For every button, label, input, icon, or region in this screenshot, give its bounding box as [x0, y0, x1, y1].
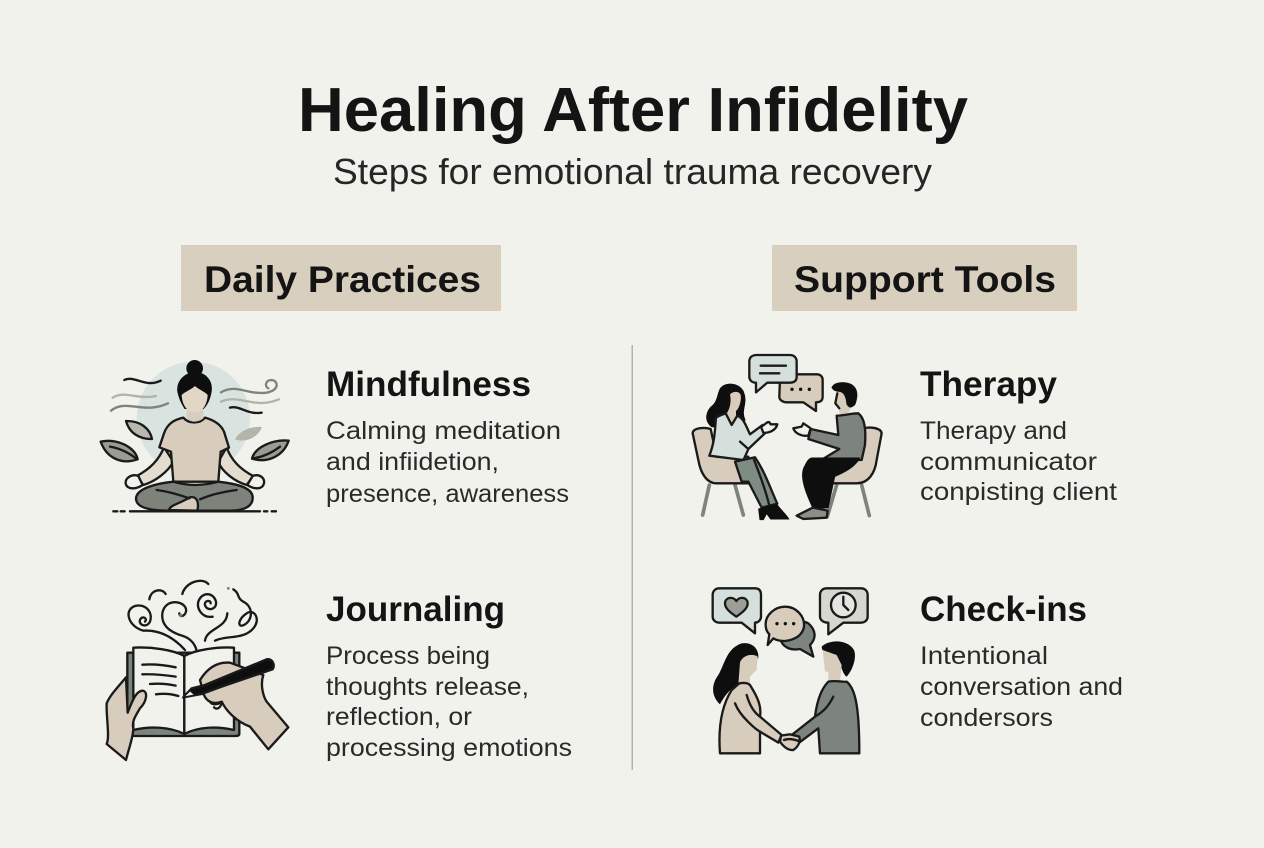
item: Therapy: Therapy and	[920, 417, 1067, 445]
item: Journaling: reflection, or	[326, 703, 472, 731]
item: Journaling: Process being	[326, 642, 490, 670]
icon: meditation	[101, 360, 289, 511]
item: Therapy: conpisting client	[920, 478, 1117, 506]
title: Healing After Infidelity	[298, 76, 969, 145]
heading: Daily Practices	[181, 245, 501, 311]
item: Therapy: Therapy	[920, 365, 1058, 404]
item: Check-ins: conversation and	[920, 673, 1123, 701]
item: Mindfulness: presence, awareness	[326, 480, 569, 508]
item: Journaling	[326, 590, 572, 762]
item: Therapy: communicator	[920, 448, 1097, 476]
heading: Support Tools: Support Tools	[794, 259, 1056, 300]
icon: journaling	[107, 581, 288, 760]
item: Therapy	[920, 365, 1117, 506]
item: Check-ins: Intentional	[920, 642, 1048, 670]
item: Check-ins	[920, 590, 1123, 732]
item: Journaling: Journaling	[326, 590, 505, 629]
heading: Support Tools	[772, 245, 1077, 311]
item: Mindfulness	[326, 365, 569, 508]
item: Mindfulness: Calming meditation	[326, 417, 561, 445]
subtitle: Steps for emotional trauma recovery	[333, 151, 932, 192]
item: Check-ins: condersors	[920, 704, 1053, 732]
icon: therapy	[693, 355, 882, 520]
icon: check-ins	[713, 588, 868, 753]
item: Journaling: thoughts release,	[326, 673, 529, 701]
item: Check-ins: Check-ins	[920, 590, 1087, 629]
item: Mindfulness: Mindfulness	[326, 365, 531, 404]
heading: Daily Practices: Daily Practices	[204, 259, 481, 300]
item: Mindfulness: and infiidetion,	[326, 448, 499, 476]
item: Journaling: processing emotions	[326, 734, 572, 762]
